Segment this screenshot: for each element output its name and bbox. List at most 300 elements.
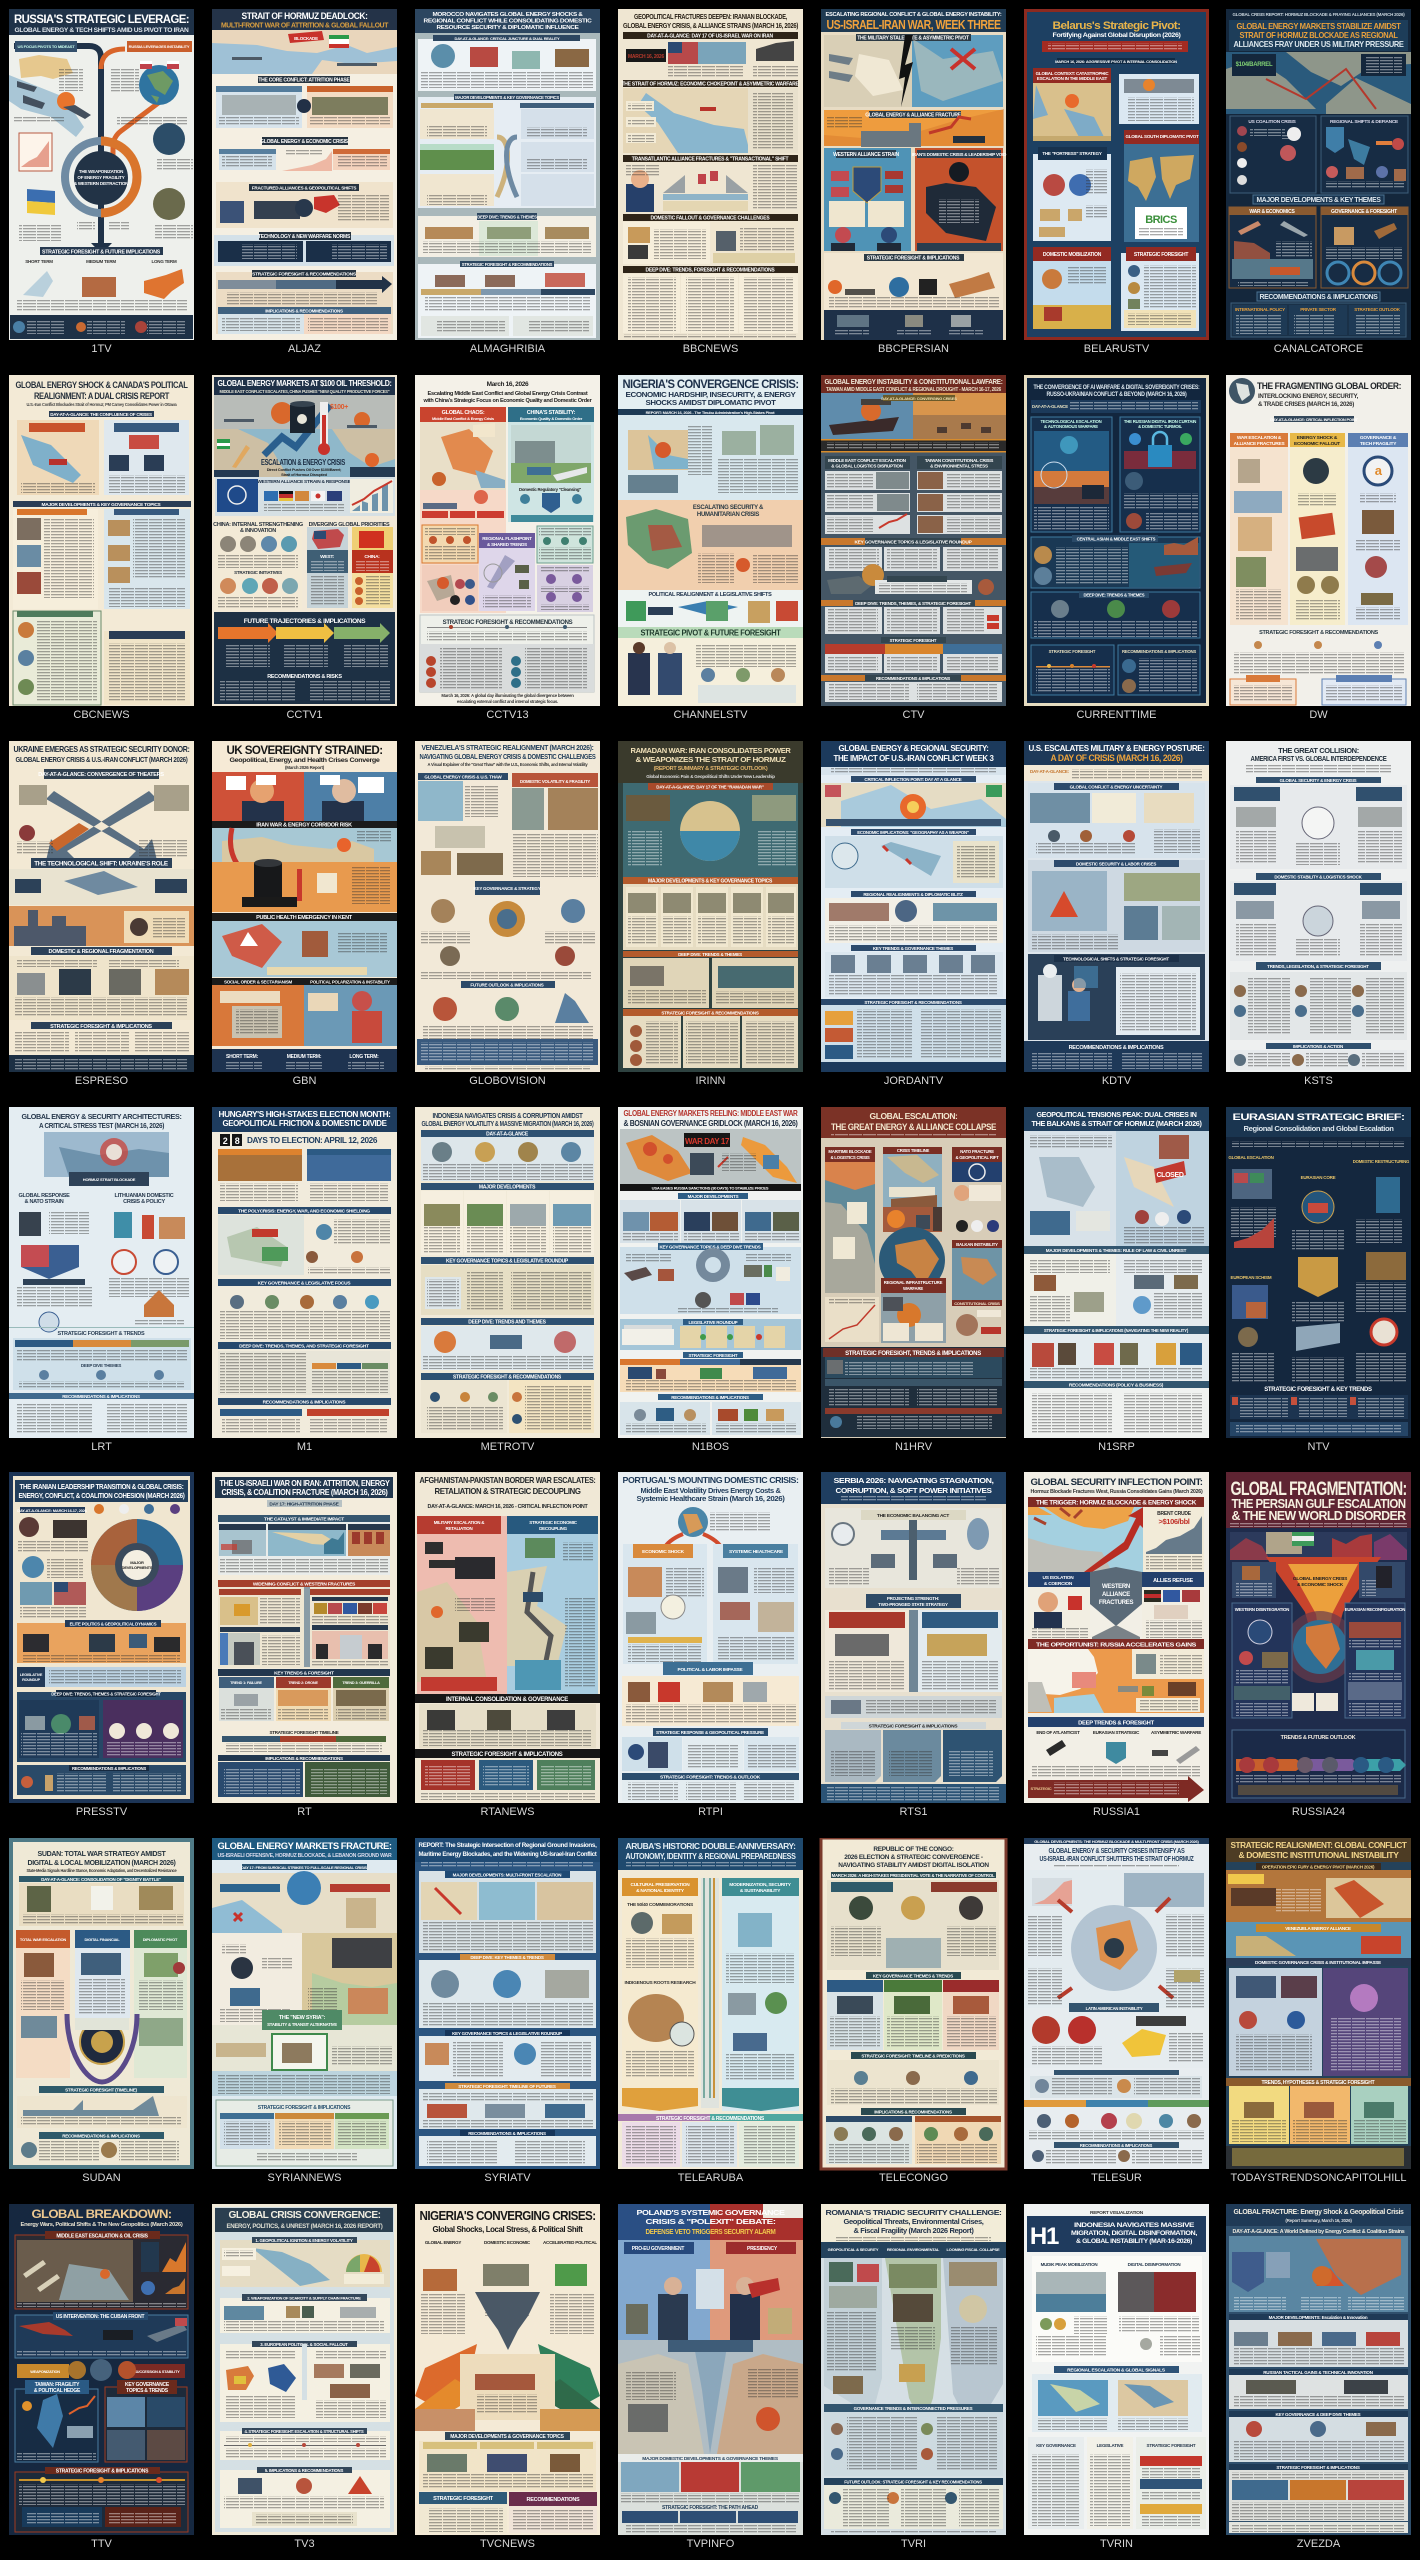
source label: SYRIATV [484, 2172, 531, 2184]
title: Global Economic Pain & Geopolitical Shifts Under New Leadership [646, 774, 775, 779]
section: core conflict [216, 76, 393, 128]
title: THE CONVERGENCE OF AI WARFARE & DIGITAL SOVEREIGNTY CRISES: [1034, 384, 1200, 391]
card: KSTS [1226, 741, 1411, 1087]
title: GLOBAL ENERGY CRISIS, & ALLIANCE STRAINS (MARCH 16, 2026) [623, 21, 799, 30]
source label: RTANEWS [480, 1806, 534, 1818]
bar: INTERNAL CONSOLIDATION & GOVERNANCE [446, 1697, 568, 1703]
foresight columns [17, 259, 187, 312]
section: foresight: STRATEGIC FORESIGHT & RECOMMENDATIONS [252, 272, 357, 278]
section: recommendations [419, 2130, 596, 2166]
footer bar [10, 315, 193, 339]
section: day at a glance [418, 35, 596, 91]
title: THE BALKANS & STRAIT OF HORMUZ (MARCH 2026) [1032, 1119, 1202, 1128]
column: modernization [722, 1878, 799, 2111]
panel: Balkan instability: BALKAN INSTABILITY [956, 1242, 998, 1247]
source line [831, 2530, 996, 2534]
section: foresight: STRATEGIC FORESIGHT [689, 1353, 738, 1358]
title: SHOCKS AMIDST DIPLOMATIC PIVOT [646, 398, 776, 407]
column: tech: GOVERNANCE & [1360, 435, 1397, 441]
title: INDONESIA NAVIGATES MASSIVE [1074, 2223, 1194, 2229]
title: INDONESIA NAVIGATES CRISIS & CORRUPTION AMIDST [432, 1113, 583, 1120]
section: recommendations: IMPLICATIONS & RECOMMENDATIONS [265, 1756, 343, 1761]
panel: politics [104, 420, 189, 495]
panel: trends: EURASIAN STRATEGIC [1093, 1730, 1140, 1735]
source label: METROTV [481, 1441, 535, 1453]
panel: deep dive [1031, 591, 1200, 638]
panel: new syria: THE "NEW SYRIA": [279, 2015, 326, 2021]
title [1226, 1472, 1411, 1528]
source label: TTV [91, 2538, 113, 2550]
panel: global conflict [13, 509, 98, 609]
column: culture: INDIGENOUS ROOTS RESEARCH [624, 1980, 696, 1986]
section: foresight: STRATEGIC FORESIGHT & RECOMMENDATIONS [656, 2116, 765, 2122]
column: escalation: GLOBAL ESCALATION [1228, 1155, 1274, 1160]
title: GLOBAL ENERGY INSTABILITY & CONSTITUTIONAL LAWFARE: [824, 377, 1002, 386]
card: BELARUSTV [1024, 9, 1209, 355]
heading: escalation: ESCALATION & ENERGY CRISIS [261, 458, 346, 467]
section: catalyst: THE CATALYST & IMMEDIATE IMPACT [264, 1516, 344, 1522]
arrows [415, 2292, 600, 2424]
title: GLOBAL ENERGY MARKETS AT $100 OIL THRESHOLD: [218, 379, 392, 388]
panel: political realignment [618, 590, 803, 627]
source label: BBCNEWS [683, 343, 738, 355]
source label: TVRIN [1100, 2538, 1133, 2550]
panel: foresight: STRATEGIC FORESIGHT & RECOMMENDATIONS [864, 1000, 962, 1005]
card: TVRI [821, 2204, 1006, 2550]
footer [821, 1784, 1006, 1803]
panel: diplomatic blitz [825, 891, 1003, 943]
title [1226, 1838, 1411, 1862]
section: foresight: STRATEGIC FORESIGHT & IMPLICATIONS [867, 256, 960, 262]
band [212, 2071, 397, 2096]
title: ARUBA'S HISTORIC DOUBLE-ANNIVERSARY: [626, 1842, 796, 1851]
title: THE GREAT COLLISION: [1278, 746, 1359, 755]
title: A DAY OF CRISIS (MARCH 16, 2026) [1050, 753, 1183, 763]
title [9, 9, 194, 35]
panel: governance: GOVERNANCE & FORESIGHT [1331, 209, 1397, 215]
bar: KEY GOVERNANCE TOPICS & LEGISLATIVE ROUNDUP [446, 1258, 569, 1264]
title: MIGRATION, DIGITAL DISINFORMATION, [1071, 2231, 1198, 2237]
title: RAMADAN WAR: IRAN CONSOLIDATES POWER [630, 746, 791, 755]
title [622, 377, 798, 407]
title [1030, 1477, 1203, 1495]
source label: KSTS [1304, 1075, 1333, 1087]
caption: March 16, 2026: A global day illuminating the global divergence between [441, 693, 574, 698]
panel: west priorities [307, 522, 390, 608]
panel: polarization [304, 978, 397, 1046]
column text: GLOBAL ENERGY [425, 2240, 461, 2245]
intro [1031, 400, 1201, 413]
panel: trigger: >$106/bbl [1158, 1517, 1190, 1526]
panel: pro-EU and president: PRESIDENCY [747, 2246, 778, 2252]
footer [417, 1039, 598, 1072]
title [1024, 741, 1209, 765]
panel: domestic [9, 956, 194, 1020]
card: TTV [9, 2204, 194, 2550]
panel: three columns: DIPLOMATIC PIVOT [143, 1937, 178, 1942]
panel: domestic [1230, 881, 1407, 961]
panel: strategic foresight: STRATEGIC FORESIGHT [433, 2496, 494, 2502]
bar: deep dive: DEEP DIVE: TRENDS & THEMES [678, 952, 742, 957]
panel: political: POLITICAL & LABOR IMPASSE [678, 1667, 744, 1673]
source label: TELEARUBA [678, 2172, 744, 2184]
title: Fortifying Against Global Disruption (2026) [1052, 32, 1181, 39]
source label: N1BOS [692, 1441, 729, 1453]
panel: health [212, 921, 397, 977]
panel: glance [421, 1137, 594, 1181]
panel: western alliance: WESTERN ALLIANCE STRAIN & RESPONSE [257, 479, 352, 485]
title: GLOBAL ENERGY & SECURITY ARCHITECTURES: [22, 1112, 182, 1121]
title [1027, 2216, 1206, 2252]
section: polycrisis [218, 1207, 391, 1275]
panel: pro-EU and president: PRO-EU GOVERNMENT [632, 2246, 684, 2252]
panel: internal [419, 1704, 596, 1748]
heading: pivot: STRATEGIC PIVOT & FUTURE FORESIGHT [640, 628, 781, 638]
section: developments [419, 1871, 596, 1953]
panel: foresight: STRATEGIC FORESIGHT [1049, 649, 1096, 654]
title: THE GREAT ENERGY & ALLIANCE COLLAPSE [831, 1122, 996, 1132]
panel: Balkan instability [952, 1240, 1002, 1336]
panel: deep dive [623, 958, 798, 1008]
source label: GLOBOVISION [469, 1075, 546, 1087]
column: global response: GLOBAL RESPONSE [18, 1193, 70, 1199]
section: tactical [1229, 2369, 1408, 2409]
panel: recommendations [104, 631, 190, 705]
panel: elite politics: ELITE POLITICS & GEOPOLITICAL DYNAMICS [70, 1622, 157, 1626]
panel: vote [827, 1880, 999, 1970]
panel: decoupling: DECOUPLING [539, 1526, 568, 1531]
map: blockade: HORMUZ STRAIT BLOCKADE [83, 1177, 136, 1182]
panel: digital iron curtain: THE RUSSIAN DIGITAL IRON CURTAIN [1124, 419, 1196, 424]
title: GLOBAL ENERGY MARKETS STABILIZE AMIDST [1236, 21, 1402, 31]
card: TVCNEWS [415, 2204, 600, 2550]
panel: day at a glance [623, 783, 798, 877]
panel: domestic mobilization [1033, 247, 1111, 329]
title [821, 375, 1006, 393]
section: balancing act: THE ECONOMIC BALANCING ACT [877, 1513, 949, 1519]
title [14, 744, 190, 764]
title: & Fiscal Fragility (March 2026 Report) [854, 2228, 974, 2235]
panel: mudik and disinformation: MUDIK PEAK MOBILIZATION [1041, 2262, 1097, 2267]
heading: major developments: MAJOR DEVELOPMENTS & KEY THEMES [1256, 197, 1381, 204]
panel: regional flashpoint [479, 533, 535, 611]
panel: foresight [1121, 247, 1199, 331]
footer [212, 1049, 397, 1072]
card: CTV [821, 375, 1006, 721]
panel: foresight [421, 1380, 594, 1433]
title [1226, 2204, 1411, 2226]
section: tactical: RUSSIAN TACTICAL GAINS & TECHNICAL INNOVATION [1263, 2370, 1373, 2375]
section: governance [218, 1279, 391, 1339]
title: 2026 ELECTION & STRATEGIC CONVERGENCE - [844, 1854, 983, 1861]
card: RUSSIA1 [1024, 1472, 1209, 1818]
card: TVRIN [1024, 2204, 1209, 2550]
source label: TODAYSTRENDSONCAPITOLHILL [1230, 2172, 1407, 2184]
section: foresight: STRATEGIC FORESIGHT & RECOMMENDATIONS [462, 262, 553, 267]
section: energy crisis: GLOBAL ENERGY & ECONOMIC CRISIS [260, 139, 349, 145]
title: Maritime Energy Blockades, and the Widening US-Israel-Iran Conflict [418, 1851, 598, 1858]
bar: outlook [461, 981, 555, 988]
title: GLOBAL ENERGY VOLATILITY & MASSIVE MIGRATION (MARCH 16, 2026) [422, 1121, 594, 1128]
panel: day at a glance: DAY-AT-A-GLANCE: DAY 17 OF THE "RAMADAN WAR" [656, 784, 764, 790]
column: fiscal [943, 2258, 1003, 2434]
subtitle [1230, 1522, 1407, 1527]
title [22, 1112, 182, 1130]
section: foresight [419, 2083, 596, 2129]
column: tech: TECH FRAGILITY [1360, 441, 1397, 447]
title: GLOBAL ENERGY & REGIONAL SECURITY: [838, 744, 988, 753]
intro text [821, 439, 1006, 452]
panel: recommendations: RECOMMENDATIONS & IMPLICATIONS [1122, 649, 1196, 654]
heading: pivot [618, 627, 803, 638]
bar: MAJOR DOMESTIC DEVELOPMENTS & GOVERNANCE THEMES [642, 2456, 779, 2462]
panel: social order: SOCIAL ORDER & SECTARIANISM [224, 980, 292, 984]
source label: NTV [1308, 1441, 1330, 1453]
panel: trigger: BRENT CRUDE [1157, 1511, 1192, 1517]
column: culture: & NATIONAL IDENTITY [636, 1888, 685, 1894]
bar: STRATEGIC FORESIGHT & RECOMMENDATIONS [453, 1374, 562, 1380]
title: REPORT: The Strategic Intersection of Regional Ground Invasions, [418, 1842, 597, 1849]
column: crisis: GLOBAL ENERGY CRISIS & U.S. THAW [424, 774, 503, 780]
caption: escalating external conflict and internal strategic focus. [457, 699, 558, 704]
card: KDTV [1024, 741, 1209, 1087]
card: TV3 [212, 2204, 397, 2550]
section: recommendations: RECOMMENDATIONS & IMPLICATIONS [671, 1395, 749, 1400]
panel: recommendations: RECOMMENDATIONS & IMPLICATIONS [62, 1394, 140, 1399]
section: foresight: IMPLICATIONS & RECOMMENDATIONS [265, 308, 343, 314]
countdown: 2 [223, 1136, 228, 1146]
panel: governance themes: KEY TRENDS & GOVERNANCE THEMES [873, 946, 953, 951]
panel: glance [19, 1883, 184, 1926]
source label: ZVEZDA [1297, 2538, 1341, 2550]
panel: China: & INNOVATION [240, 528, 276, 534]
panel: global south: GLOBAL SOUTH DIPLOMATIC PIVOT [1125, 134, 1199, 139]
panel: columns: STRATEGIC FORESIGHT [1147, 2443, 1196, 2448]
caption [441, 693, 574, 704]
heading: foresight [420, 615, 594, 692]
section: domestic fallout [623, 214, 798, 264]
column: culture: THE 50/40 COMMEMORATIONS [627, 1902, 694, 1908]
panel: economic shock [623, 1544, 707, 1664]
card: TELEARUBA [618, 1838, 803, 2184]
panel: regional [1032, 2374, 1202, 2432]
hero scene: $100+ [330, 404, 348, 411]
source label: RTPI [698, 1806, 723, 1818]
title: ESCALATING REGIONAL CONFLICT & GLOBAL ENERGY INSTABILITY: [826, 12, 1002, 18]
countdown: 8 [235, 1136, 240, 1146]
banner [1256, 1863, 1381, 1870]
section: conflict [218, 1580, 390, 1668]
section: recommendations: RECOMMENDATIONS & IMPLICATIONS [62, 2134, 140, 2138]
pill: DAY-AT-A-GLANCE: THE CONFLUENCE OF CRISES [50, 412, 152, 417]
title: US-ISRAELI OFFENSIVE, HORMUZ BLOCKADE, & LEBANON GROUND WAR [218, 1853, 392, 1859]
source label: CURRENTTIME [1076, 709, 1157, 721]
bar: deep dive [623, 951, 798, 957]
section: strait map [621, 80, 799, 153]
panel: energy alliance [1226, 1922, 1411, 1958]
panel: elite politics [17, 1620, 186, 1663]
bar: corridor: IRAN WAR & ENERGY CORRIDOR RISK [256, 822, 352, 828]
bar: foresight: STRATEGIC FORESIGHT & IMPLICATIONS [50, 1024, 152, 1030]
title: NIGERIA'S CONVERGENCE CRISIS: [622, 377, 798, 391]
section: timeline [17, 2086, 187, 2128]
card: TVPINFO [618, 2204, 803, 2550]
section: foresight [418, 261, 596, 338]
section: strait map: THE STRAIT OF HORMUZ: ECONOMIC CHOKEPOINT & ASYMMETRIC WARFARE [621, 82, 799, 88]
section: governance: KEY GOVERNANCE THEMES & TRENDS [873, 1974, 953, 1978]
footer arrow [1028, 1776, 1204, 1802]
pill [1256, 777, 1381, 783]
arrows [421, 1760, 595, 1800]
card: TELESUR [1024, 1838, 1209, 2184]
source label: CANALCATORCE [1274, 343, 1363, 355]
foresight columns: SHORT TERM [25, 259, 53, 264]
footer [1226, 2146, 1411, 2169]
card: PRESSTV [9, 1472, 194, 1818]
card: LRT [9, 1107, 194, 1453]
panel: centre [460, 2354, 555, 2420]
pill: MARCH 2026: A HIGH-STAKES PRESIDENTIAL VOTE & THE NARRATIVE OF CONTROL [832, 1873, 995, 1878]
report bar: REPORT: MARCH 16, 2026 - The Tinubu Administration's High-Stakes Pivot [646, 410, 775, 415]
source label: TELECONGO [879, 2172, 948, 2184]
card: BBCNEWS [618, 9, 803, 355]
heading: escalation: Strait of Hormuz Disrupted [281, 472, 328, 477]
section: timeline: STRATEGIC FORESIGHT (TIMELINE) [65, 2088, 138, 2092]
card: CCTV13 [415, 375, 600, 721]
bar: tech shift [31, 858, 172, 868]
source label: CTV [902, 709, 925, 721]
title [1226, 1107, 1411, 1137]
bridge [1092, 1625, 1140, 1640]
card: SYRIANNEWS [212, 1838, 397, 2184]
section: implications: IMPLICATIONS & RECOMMENDATIONS [874, 2110, 952, 2114]
panel: recommendations: RECOMMENDATIONS & IMPLICATIONS [876, 676, 950, 681]
panel: security: ESCALATING SECURITY & [693, 505, 764, 511]
source label: N1SRP [1098, 1441, 1135, 1453]
left column [18, 1517, 88, 1619]
title: Hormuz Blockade Fractures West, Russia Consolidates Gains (March 2026) [1030, 1489, 1203, 1495]
panel: global conflict: GLOBAL CONFLICT & ENERGY UNCERTAINTY [1070, 784, 1163, 790]
title: U.S. ESCALATES MILITARY & ENERGY POSTURE: [1028, 743, 1205, 753]
source label: DW [1309, 709, 1328, 721]
source label: RUSSIA24 [1292, 1806, 1345, 1818]
section: foresight [1024, 2100, 1209, 2140]
panel: Eurasian reconfiguration: EURASIAN RECONFIGURATION [1345, 1607, 1405, 1612]
bar: THE OPPORTUNIST: RUSSIA ACCELERATES GAINS [1036, 1642, 1197, 1648]
source label: TVCNEWS [480, 2538, 535, 2550]
title [20, 2207, 183, 2228]
bar: outlook: FUTURE OUTLOOK & IMPLICATIONS [470, 982, 544, 988]
title: AUTONOMY, IDENTITY & REGIONAL PREPAREDNESS [626, 1852, 796, 1861]
title [1246, 746, 1391, 773]
panel: regional flashpoint: & SHARED TRENDS [487, 542, 527, 547]
panel: global south: BRICS [1145, 214, 1177, 226]
title: DAY-AT-A-GLANCE: MARCH 16, 2026 - CRITICAL INFLECTION POINT [428, 1504, 588, 1510]
title: ROMANIA'S TRIADIC SECURITY CHALLENGE: [826, 2208, 1002, 2217]
panel: strategic foresight [419, 2492, 507, 2533]
panel: global chaos [420, 407, 506, 613]
panel: themes [621, 2462, 800, 2503]
pill and flow [17, 1504, 180, 1514]
panel: china stability: Economic Quality & Domestic Order [520, 416, 583, 421]
panel: China: CHINA: INTERNAL STRENGTHENING [213, 522, 303, 528]
bar [1028, 1639, 1204, 1649]
section: oil crisis [15, 2231, 188, 2309]
globe [1284, 1611, 1356, 1683]
footer arrow: STRATEGIC [1030, 1786, 1052, 1791]
card: JORDANTV [821, 741, 1006, 1087]
section: legislative: LEGISLATIVE ROUNDUP [689, 1320, 738, 1325]
section: domestic fallout: DOMESTIC FALLOUT & GOVERNANCE CHALLENGES [651, 216, 770, 222]
title: ENERGY, POLITICS, & UNREST (MARCH 16, 2026 REPORT) [226, 2223, 383, 2230]
pill [1266, 1043, 1371, 1049]
panel: trends [1230, 972, 1407, 1040]
panel: china priorities: CHINA: [364, 554, 380, 560]
section: trends: TREND 1: FAILURE [230, 1681, 263, 1685]
title [420, 1475, 596, 1510]
section: recommendations [1032, 2142, 1202, 2164]
footer [821, 1062, 1006, 1072]
panel: strategic response [622, 1728, 799, 1771]
panel: foresight [821, 999, 1006, 1062]
heading: recommendations: RECOMMENDATIONS & IMPLICATIONS [1260, 294, 1378, 301]
report bar [618, 409, 803, 415]
title [422, 381, 593, 404]
panel: outlook [622, 1773, 799, 1801]
hero image [821, 393, 1006, 439]
globe [879, 1227, 945, 1293]
section: day at a glance: DAY-AT-A-GLANCE: CRITICAL JUNCTURE & DUAL REALITY [455, 36, 560, 41]
source label: PRESSTV [76, 1806, 128, 1818]
section: Cuba [15, 2312, 188, 2358]
panel: isolation: & COERCION [1044, 1581, 1073, 1587]
title [821, 741, 1006, 767]
title: & BOSNIAN GOVERNANCE GRIDLOCK (MARCH 16, 2026) [624, 1119, 798, 1128]
section: technology [214, 232, 394, 266]
section: catalyst [218, 1515, 390, 1575]
section: alliance: TRANSATLANTIC ALLIANCE FRACTURES & "TRANSACTIONAL" SHIFT [632, 156, 788, 162]
title: THE IRANIAN LEADERSHIP TRANSITION & GLOBAL CRISIS: [20, 1482, 184, 1491]
panel: US coalition [1230, 116, 1316, 193]
panel: pivot [618, 638, 803, 706]
title [226, 743, 382, 770]
panel: west priorities: DIVERGING GLOBAL PRIORITIES [309, 522, 390, 528]
panel: foresight dark [821, 1347, 1006, 1437]
column: core: EURASIAN CORE [1301, 1175, 1336, 1180]
section: major developments [620, 1193, 801, 1243]
pill [267, 1500, 342, 1508]
panel: technological escalation [1031, 417, 1112, 532]
section: governance: KEY GOVERNANCE & DEEP DIVE THEMES [1276, 2412, 1361, 2417]
panel: global chaos: Middle East Conflict & Energy Crisis [432, 416, 495, 421]
chart: scenario [825, 1297, 879, 1342]
section: trends: TRENDS, HYPOTHESES & STRATEGIC FORESIGHT [1262, 2080, 1375, 2086]
panel: legislative: ROUNDUP [22, 1678, 41, 1682]
section: Iran crisis [912, 148, 1007, 251]
card: RTANEWS [415, 1472, 600, 1818]
panel: developments [419, 2441, 596, 2491]
section: future outlook: FUTURE OUTLOOK: STRATEGIC FORESIGHT & KEY RECOMMENDATIONS [844, 2480, 982, 2484]
bar: MAJOR DEVELOPMENTS & GOVERNANCE TOPICS [450, 2434, 565, 2440]
countdown: DAYS TO ELECTION: APRIL 12, 2026 [247, 1136, 378, 1145]
panel: troops [302, 1933, 397, 2025]
panel: trends: END OF ATLANTICIST [1036, 1730, 1080, 1735]
title: CORRUPTION, & SOFT POWER INITIATIVES [836, 1486, 992, 1495]
top scene [1230, 1532, 1407, 1560]
header columns: LOOMING FISCAL COLLAPSE [947, 2247, 1000, 2252]
source label: CBCNEWS [73, 709, 130, 721]
card: CANALCATORCE [1226, 9, 1411, 355]
